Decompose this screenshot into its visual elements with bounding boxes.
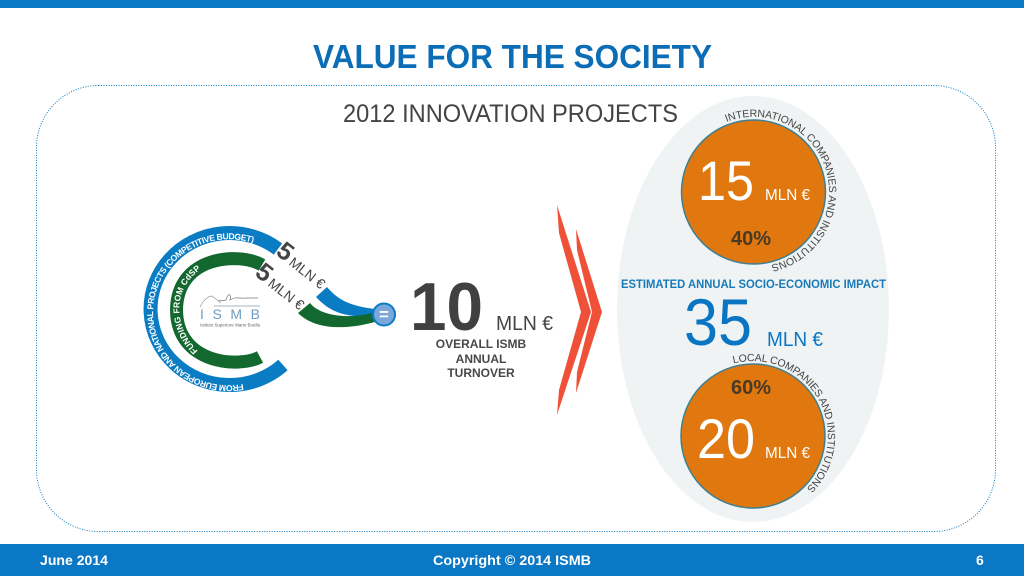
5 MLN euro: CdSP: 5MLN € <box>250 257 313 315</box>
overall turnover: MLN € <box>496 313 553 335</box>
footer bar <box>0 544 1024 576</box>
impact heading: ESTIMATED ANNUAL SOCIO-ECONOMIC IMPACT <box>621 277 887 291</box>
blue connector <box>316 287 375 316</box>
green connector <box>298 303 375 327</box>
5 MLN euro: competitive: 5MLN € <box>271 236 334 294</box>
top bar <box>0 0 1024 8</box>
circle: international: INTERNATIONAL COMPANIES AND INSTITUTIONS <box>724 110 836 272</box>
circle: international: MLN € <box>765 187 810 204</box>
impact total: 35 <box>684 285 752 359</box>
circle: international: 15 <box>698 149 754 212</box>
footer bar: June 2014 <box>40 552 108 568</box>
overall turnover: 10 <box>410 269 483 345</box>
impact ellipse <box>617 96 889 522</box>
ISMB logo: Istituto Superiore Mario Boella <box>200 322 260 328</box>
green inner ring <box>170 252 266 369</box>
circle: local <box>680 354 836 509</box>
equals badge: = <box>379 305 389 324</box>
title: VALUE FOR THE SOCIETY <box>313 38 712 75</box>
funding rings diagram <box>144 226 396 392</box>
ISMB logo <box>200 295 260 328</box>
subtitle: 2012 INNOVATION PROJECTS <box>343 100 678 128</box>
turnover caption: OVERALL ISMB <box>436 337 527 351</box>
circle: local: MLN € <box>765 445 810 462</box>
footer bar: Copyright © 2014 ISMB <box>433 552 591 568</box>
ISMB logo: ISMB <box>200 306 260 322</box>
green inner ring: FUNDING FROM CdSP <box>173 266 198 355</box>
footer bar: 6 <box>976 552 984 568</box>
circle: local: 20 <box>697 407 755 470</box>
circle: local: LOCAL COMPANIES AND INSTITUTIONS <box>732 354 836 492</box>
chevron arrow <box>557 205 602 415</box>
turnover caption <box>436 337 527 380</box>
turnover caption: TURNOVER <box>447 366 515 380</box>
turnover caption: ANNUAL <box>456 352 506 366</box>
blue outer ring: FROM EUROPEAN AND NATIONAL PROJECTS (COMPETITIVE BUDGET) <box>147 233 254 392</box>
impact total: MLN € <box>767 329 823 351</box>
equals badge <box>373 304 395 326</box>
circle: international: 40% <box>731 228 771 250</box>
impact total <box>684 285 823 359</box>
circle: local: 60% <box>731 377 771 399</box>
overall turnover <box>410 269 553 380</box>
dotted rounded panel <box>36 86 996 532</box>
